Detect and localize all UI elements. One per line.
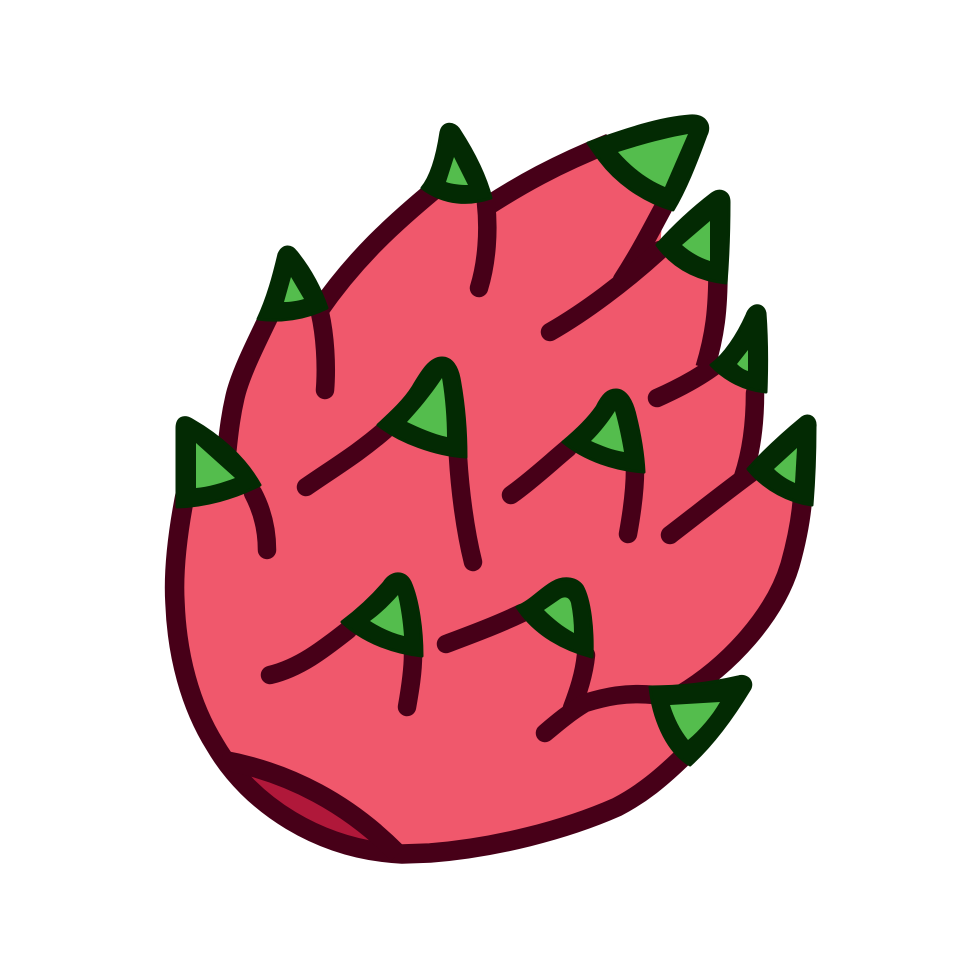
scale tips	[177, 116, 815, 765]
bottom cut upper edge	[222, 760, 398, 854]
scale stems	[253, 203, 755, 733]
fruit body fill	[175, 143, 803, 854]
tip: lower right	[650, 676, 751, 765]
tip: right middle	[711, 306, 767, 392]
tip: top right large	[588, 116, 708, 210]
tip: upper left	[258, 247, 327, 320]
tip: centre left	[378, 358, 466, 457]
tip: centre right	[563, 390, 644, 472]
tip: far right	[748, 416, 815, 505]
tip: far left	[177, 418, 260, 507]
body outline	[175, 143, 803, 854]
tip: lower centre	[517, 579, 592, 657]
tip: lower left	[342, 574, 422, 656]
tip: right upper	[657, 191, 729, 283]
bottom cut fill	[238, 772, 376, 842]
tip: top	[422, 124, 491, 202]
